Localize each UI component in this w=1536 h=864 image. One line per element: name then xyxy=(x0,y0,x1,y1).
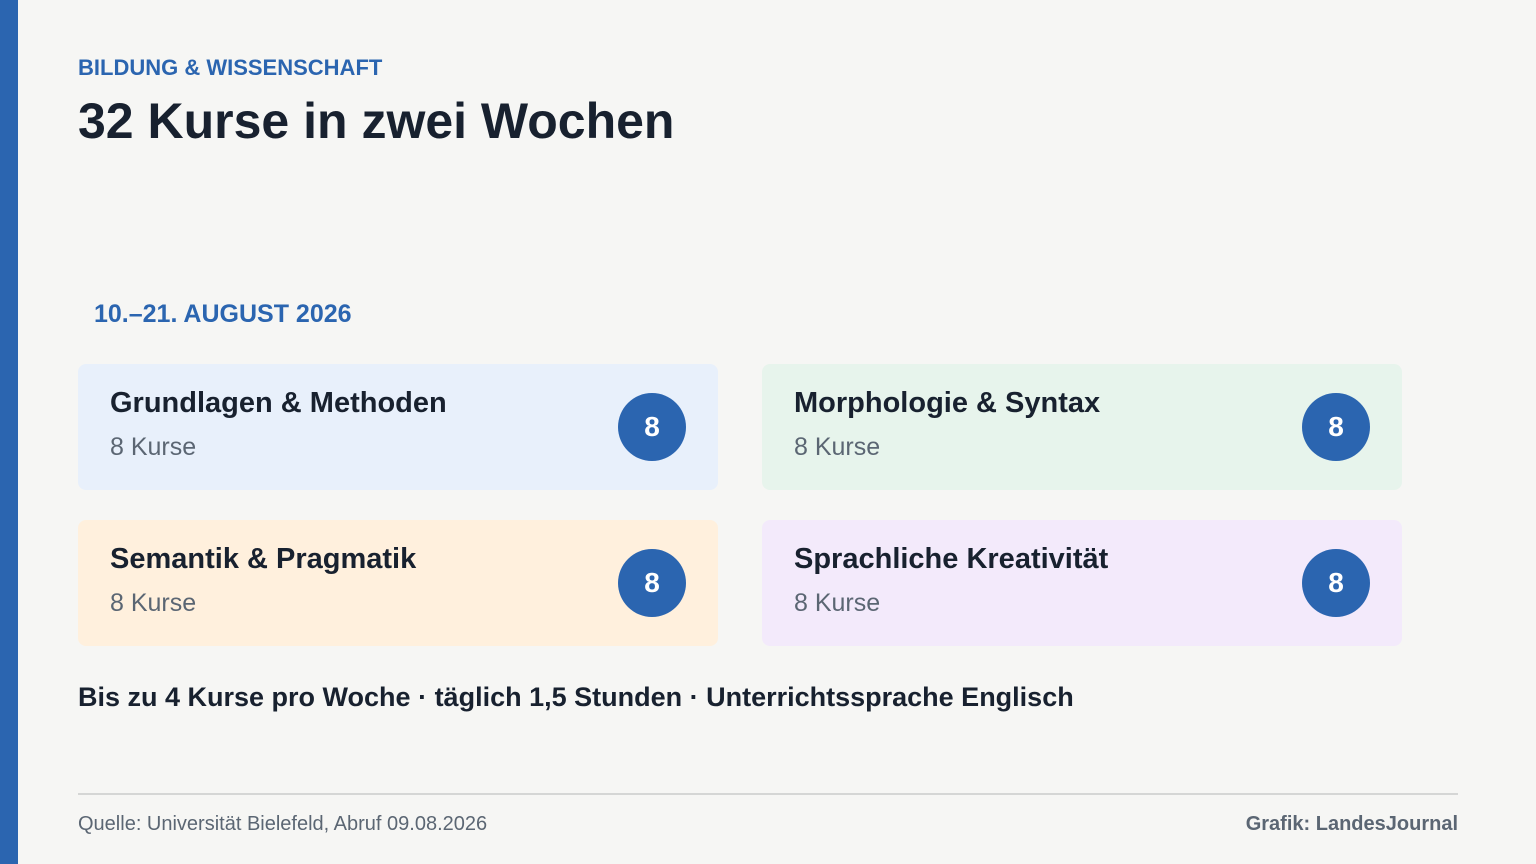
panel: Semantik & Pragmatik xyxy=(78,520,718,646)
panel: Morphologie & Syntax xyxy=(762,364,1402,490)
card subtitle: 8 Kurse xyxy=(794,433,880,461)
count badge: 8 xyxy=(1328,411,1344,442)
date heading: 10.–21. AUGUST 2026 xyxy=(94,300,352,328)
count badge xyxy=(618,549,686,617)
count badge: 8 xyxy=(1328,567,1344,598)
card subtitle: 8 Kurse xyxy=(110,433,196,461)
count badge xyxy=(1302,549,1370,617)
eyebrow: BILDUNG & WISSENSCHAFT xyxy=(78,55,382,80)
card title: Morphologie & Syntax xyxy=(794,387,1100,419)
accent bar xyxy=(0,0,18,864)
card title: Semantik & Pragmatik xyxy=(110,543,416,575)
card subtitle: 8 Kurse xyxy=(110,589,196,617)
card subtitle: 8 Kurse xyxy=(794,589,880,617)
count badge: 8 xyxy=(644,411,660,442)
count badge: 8 xyxy=(644,567,660,598)
card title: Sprachliche Kreativität xyxy=(794,543,1108,575)
source: Quelle: Universität Bielefeld, Abruf 09.08.2026 xyxy=(78,813,487,835)
title: 32 Kurse in zwei Wochen xyxy=(78,93,674,149)
count badge xyxy=(618,393,686,461)
panel: Grundlagen & Methoden xyxy=(78,364,718,490)
count badge xyxy=(1302,393,1370,461)
card title: Grundlagen & Methoden xyxy=(110,387,447,419)
summary line: Bis zu 4 Kurse pro Woche · täglich 1,5 Stunden · Unterrichtssprache Englisch xyxy=(78,682,1074,712)
credit: Grafik: LandesJournal xyxy=(1246,813,1458,835)
panel: Sprachliche Kreativität xyxy=(762,520,1402,646)
